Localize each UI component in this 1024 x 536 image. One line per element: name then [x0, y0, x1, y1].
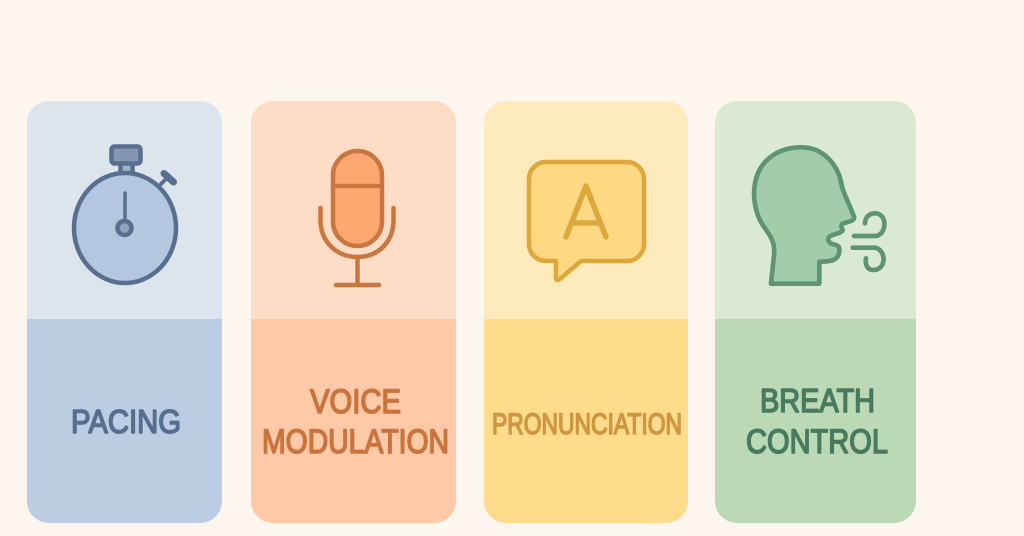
- card bottom: pacing: [27, 319, 222, 523]
- card bottom: voice modulation: [251, 319, 456, 523]
- card bottom: pronunciation: [484, 319, 688, 523]
- panel: pronunciation: [484, 101, 688, 523]
- card top: pacing: [27, 101, 222, 319]
- card top: pronunciation: [484, 101, 688, 319]
- icon: speech bubble with letter A: [529, 162, 644, 280]
- panel: pacing: [27, 101, 222, 523]
- icon: microphone: [320, 151, 394, 285]
- card top: voice modulation: [251, 101, 456, 319]
- card bottom: breath control: [715, 319, 916, 523]
- panel: voice modulation: [251, 101, 456, 523]
- label: voice: VOICE: [310, 383, 401, 421]
- icon: stopwatch: [74, 146, 176, 283]
- card top: breath control: [715, 101, 916, 319]
- label: breath: BREATH: [760, 382, 875, 419]
- label: control: CONTROL: [746, 423, 888, 461]
- label: modulation: MODULATION: [262, 423, 449, 461]
- label: pronunciation: PRONUNCIATION: [492, 408, 682, 441]
- panel: breath control: [715, 101, 916, 523]
- label: pacing: PACING: [71, 403, 181, 440]
- icon: head breathing out: [754, 147, 884, 284]
